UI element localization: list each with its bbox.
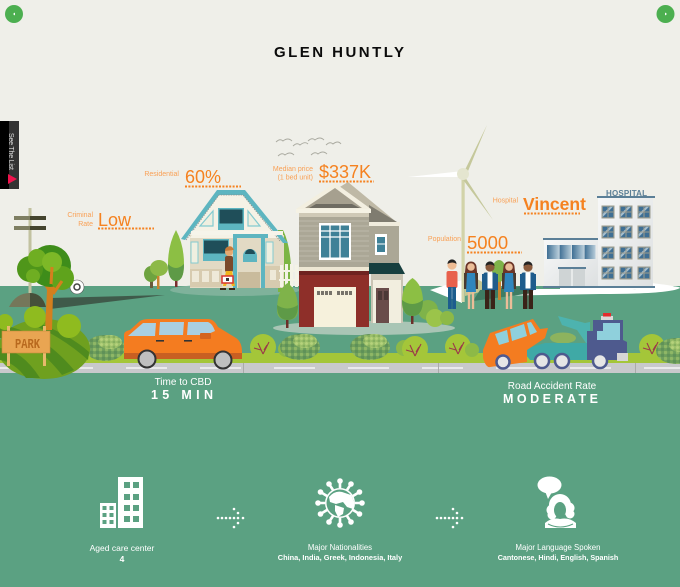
park sign [2, 326, 50, 366]
time to CBD stat: Time to CBD [155, 377, 211, 388]
criminal rate label [67, 210, 154, 230]
woman walking with for-sale sign [220, 246, 235, 289]
people group [446, 259, 536, 309]
hospital label: Hospital [493, 198, 518, 204]
large park tree [17, 245, 74, 330]
major nationalities text: Major Nationalities [308, 543, 372, 552]
population label: 5000 [467, 232, 508, 253]
side tab: see the list [0, 121, 19, 189]
time to CBD stat [151, 377, 213, 402]
road [0, 353, 680, 373]
wind turbine [408, 125, 533, 303]
aged care text [90, 543, 155, 564]
major language text: Cantonese, Hindi, English, Spanish [498, 553, 618, 562]
arrow 1 [217, 508, 244, 528]
title: GLEN HUNTLY [274, 44, 404, 61]
tree right of house [402, 278, 423, 324]
hospital building: HOSPITAL [606, 189, 647, 198]
icon: speaking woman [538, 476, 576, 528]
icon: globe with people [315, 478, 365, 528]
median price label: (1 bed unit) [278, 174, 313, 182]
hill shadow [9, 293, 165, 309]
hospital label: Vincent [523, 194, 586, 214]
bushes behind median house [418, 300, 454, 327]
aged care text: Aged care center [90, 543, 155, 553]
nav button left [5, 5, 23, 23]
tree behind people [492, 260, 506, 300]
population label [428, 232, 522, 253]
hospital label [493, 194, 586, 214]
orange car [124, 319, 242, 368]
tree left of garage [277, 283, 298, 328]
small trees [144, 230, 184, 289]
house shadow ellipse [170, 284, 300, 296]
median price label: $337K [319, 162, 371, 182]
left utility pole [14, 208, 46, 293]
residential label [144, 167, 241, 187]
white hospital ground ellipse [490, 283, 680, 296]
tow truck with crashed car [483, 313, 628, 368]
road accident rate stat: Road Accident Rate [508, 381, 597, 392]
white picket fence [279, 264, 299, 287]
hospital building [543, 189, 655, 288]
population label: Population [428, 236, 461, 243]
icon: aged care buildings [100, 477, 143, 528]
major nationalities text: China, India, Greek, Indonesia, Italy [278, 553, 403, 562]
time to CBD stat: 15 MIN [151, 388, 213, 402]
aged care text: 4 [120, 554, 125, 564]
small round marker [70, 280, 84, 294]
median price label: Median price [273, 166, 313, 173]
arrow 2 [436, 508, 463, 528]
major language text: Major Language Spoken [516, 543, 600, 552]
green ground [0, 286, 680, 587]
road accident rate stat: MODERATE [503, 392, 598, 406]
criminal rate label: Criminal [67, 212, 93, 219]
park hill [0, 306, 90, 379]
median price house [296, 182, 405, 327]
median price label [273, 162, 374, 182]
residential house [181, 190, 299, 292]
residential label: Residential [144, 171, 179, 178]
major nationalities text [278, 543, 403, 562]
residential label: 60% [185, 167, 221, 187]
criminal rate label: Rate [78, 221, 93, 228]
median house shadow ellipse [273, 321, 455, 335]
roadside shrubs and bushes [85, 334, 680, 364]
park sign: PARK [15, 337, 40, 353]
road accident rate stat [503, 381, 598, 406]
side tab: see the list: See The List [7, 133, 14, 170]
criminal rate label: Low [98, 210, 132, 230]
birds [276, 138, 341, 156]
nav button right [656, 5, 674, 23]
major language text [498, 543, 618, 562]
